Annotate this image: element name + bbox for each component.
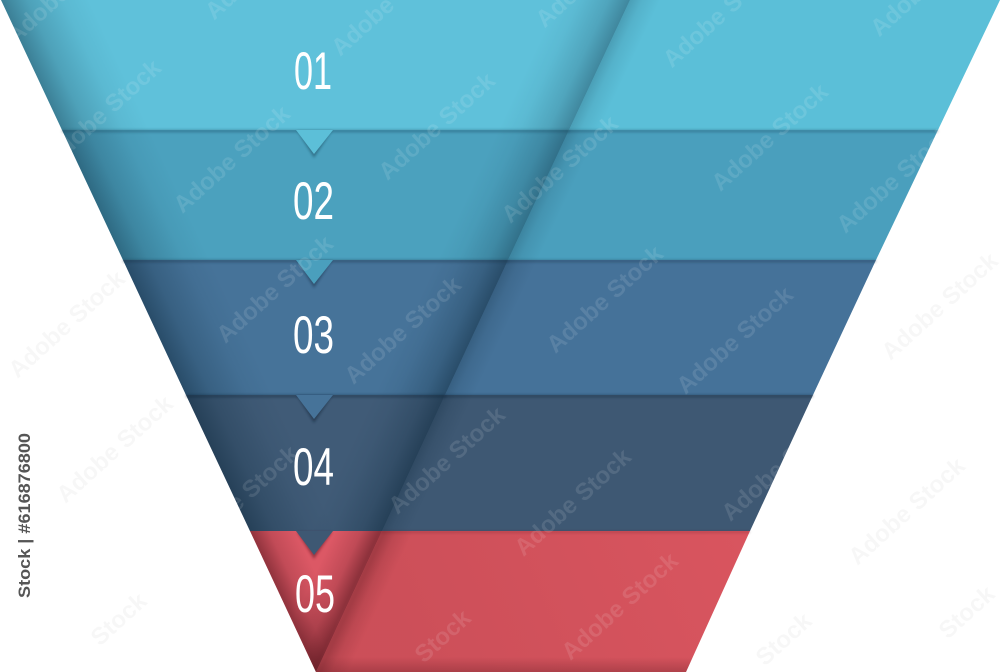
arrow 2 <box>296 260 333 288</box>
stock watermarks: Adobe Stock <box>211 230 339 349</box>
watermarks on white background <box>3 247 1000 671</box>
number 05: 05 <box>295 565 335 624</box>
band 5 right <box>316 531 750 672</box>
band 2 left <box>62 130 569 260</box>
stock watermarks: Adobe Stock <box>373 67 501 186</box>
watermarks on white background: Stock <box>751 607 818 671</box>
band 3 right <box>440 260 876 395</box>
stock watermarks: Adobe Stock <box>176 440 304 559</box>
number 02: 02 <box>293 172 334 231</box>
stock watermarks: Adobe Stock <box>496 110 624 229</box>
band 5 left <box>250 531 382 672</box>
stock watermarks: Stock <box>410 604 477 668</box>
arrow 3 <box>296 395 333 423</box>
stock watermarks: Adobe Stock <box>383 401 511 520</box>
watermarks on white background: Adobe Stock <box>3 265 131 384</box>
number 04: 04 <box>293 438 334 497</box>
stock watermarks: Adobe Stock <box>556 547 684 666</box>
stock watermarks: Adobe Stock <box>671 281 799 400</box>
band 4 left <box>186 395 445 531</box>
band 1 left <box>1 0 630 130</box>
stock id side label: Stock | #616876800 <box>15 433 34 598</box>
stock watermarks: Adobe Stock <box>541 240 669 359</box>
number 03: 03 <box>293 306 334 365</box>
stock watermarks: Adobe Stock <box>39 54 167 173</box>
watermarks on white background: Adobe Stock <box>876 247 1000 366</box>
stock watermarks: Adobe Stock <box>168 100 296 219</box>
pointer arrows between bands <box>296 130 333 559</box>
stock watermarks: Adobe Stock <box>339 271 467 390</box>
number 01: 01 <box>294 42 332 101</box>
arrow 4 <box>296 531 333 559</box>
stock watermarks: Adobe Stock <box>716 408 844 527</box>
band 2 right <box>503 130 938 260</box>
watermarks on white background: Adobe Stock <box>843 452 971 571</box>
arrow 1 <box>296 130 333 158</box>
watermarks on white background: Stock <box>86 587 153 651</box>
band 3 left <box>123 260 508 395</box>
funnel: right column bands <box>316 0 1000 672</box>
stock watermarks: Adobe Stock <box>509 443 637 562</box>
band 1 right <box>564 0 1000 130</box>
stock watermarks: Adobe Stock <box>831 120 959 239</box>
watermarks on white background: Stock <box>934 580 1000 644</box>
funnel: left column bands <box>1 0 630 672</box>
stock watermarks: Adobe Stock <box>706 78 834 197</box>
band 4 right <box>377 395 813 531</box>
band numbers <box>293 42 335 624</box>
watermarks on white background: Adobe Stock <box>51 390 179 509</box>
